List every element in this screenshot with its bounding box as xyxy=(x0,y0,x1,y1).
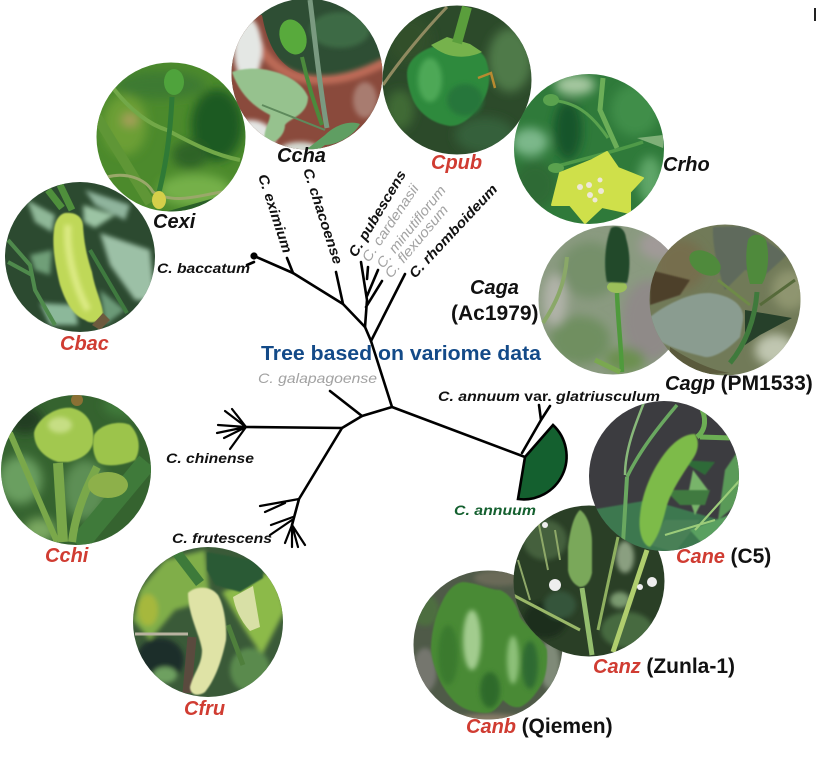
species labels on tree: C. frutescens xyxy=(172,530,272,546)
species labels on tree: C. pubescens xyxy=(345,167,409,260)
photo: Cpub pepper xyxy=(380,2,535,157)
photo: Caga pepper xyxy=(538,226,668,374)
species labels on tree: C. annuum var. glatriusculum xyxy=(438,388,660,404)
species labels on tree: C. baccatum xyxy=(157,260,250,276)
photo labels: Cfru xyxy=(184,698,225,720)
photo labels: Cagp (PM1533) xyxy=(665,372,813,395)
photo: Cexi pepper xyxy=(95,60,250,215)
photo labels: Caga xyxy=(470,277,519,299)
photo labels: Cbac xyxy=(60,333,109,355)
tree title: Tree based on variome data xyxy=(261,342,542,365)
species labels on tree: C. galapagoense xyxy=(258,370,377,386)
phylogenetic tree xyxy=(217,252,567,547)
photo labels: Crho xyxy=(663,154,710,176)
species labels on tree: C. annuum xyxy=(454,502,536,518)
species labels on tree: C. chinense xyxy=(166,450,254,466)
photo labels: Cchi xyxy=(45,545,89,567)
C. annuum clade wedge xyxy=(518,425,567,499)
photo labels xyxy=(45,145,813,738)
photo: Cane pepper xyxy=(587,399,742,554)
species labels on tree: C. chacoense xyxy=(300,166,346,266)
corner mark xyxy=(814,8,816,21)
species labels on tree: C. cardenasii xyxy=(358,180,422,265)
species labels on tree xyxy=(157,166,660,546)
photo labels: Canz (Zunla-1) xyxy=(593,655,735,678)
photo: Crho flower xyxy=(512,72,667,227)
photo: Cagp pepper xyxy=(647,224,808,376)
photo: Canz pepper xyxy=(511,503,669,661)
tree branches xyxy=(217,252,550,547)
photo labels: Cexi xyxy=(153,211,196,233)
photo: Cbac pepper xyxy=(0,180,160,335)
species labels on tree: C. flexuosum xyxy=(381,201,451,281)
photo labels: (Ac1979) xyxy=(451,302,539,325)
photo labels: Canb (Qiemen) xyxy=(466,715,613,738)
photo: Cchi peppers xyxy=(0,393,154,548)
photo: Cfru pepper xyxy=(131,545,286,700)
species labels on tree: C. eximium xyxy=(255,172,296,255)
photo: Canb bell pepper xyxy=(411,568,566,726)
species labels on tree: C. minutiflorum xyxy=(373,182,449,271)
photo labels: Ccha xyxy=(277,145,326,167)
photo: Ccha pepper xyxy=(232,0,382,150)
species labels on tree: C. rhomboideum xyxy=(405,181,500,281)
photo labels: Cpub xyxy=(431,152,482,174)
photo labels: Cane (C5) xyxy=(676,545,771,568)
